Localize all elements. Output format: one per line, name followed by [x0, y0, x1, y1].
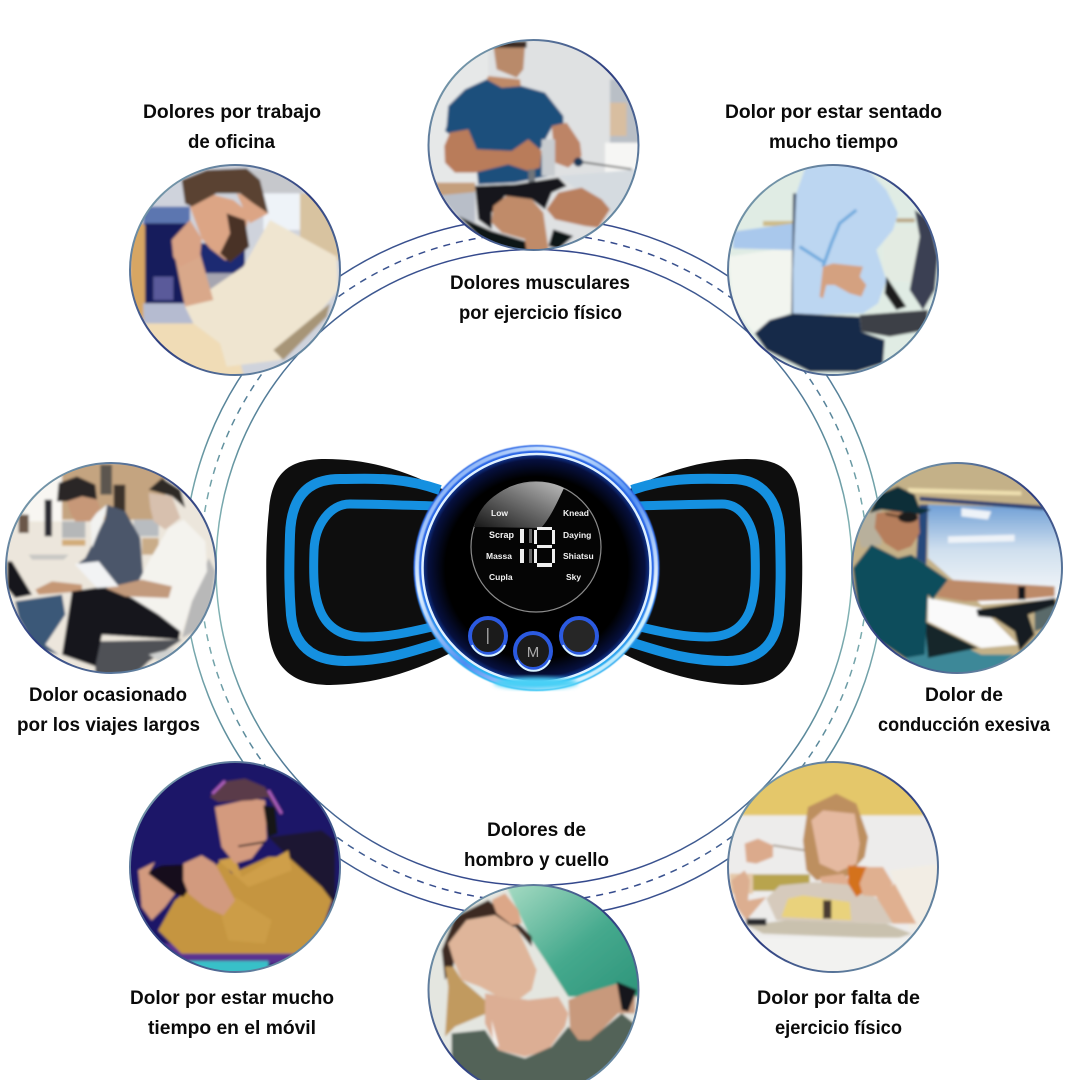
device LCD screen: Shiatsu	[563, 551, 594, 561]
device LCD screen	[471, 482, 601, 612]
LCD digits	[520, 527, 555, 567]
label: driving	[878, 685, 1050, 736]
label: no exercise: Dolor por falta de	[757, 988, 920, 1009]
device LCD screen: Sky	[566, 572, 581, 582]
label: no exercise	[757, 988, 920, 1039]
device LCD screen: Low	[491, 508, 508, 518]
device: butterfly massager	[266, 445, 802, 691]
label: trips: Dolor ocasionado	[29, 685, 187, 706]
device LCD screen: Massa	[486, 551, 512, 561]
label: trips	[17, 685, 200, 736]
label: sitting: mucho tiempo	[769, 132, 898, 153]
label: office: de oficina	[188, 132, 275, 153]
label: sitting: Dolor por estar sentado	[725, 102, 942, 123]
photo: sitting pain	[729, 166, 937, 374]
device LCD screen: Daying	[563, 530, 591, 540]
device LCD screen: Cupla	[489, 572, 513, 582]
label: exercise: Dolores musculares	[450, 273, 630, 294]
device hub	[414, 445, 660, 691]
label: driving: Dolor de	[925, 685, 1003, 706]
device LCD screen: Knead	[563, 508, 589, 518]
photo: phone pain	[131, 763, 339, 971]
photo: driving pain	[853, 464, 1061, 672]
label: exercise: por ejercicio físico	[459, 303, 622, 324]
label: shoulder	[464, 820, 609, 871]
photo: shoulder and neck pain	[430, 886, 638, 1080]
photo: office pain	[131, 166, 339, 374]
device left wing	[266, 459, 456, 685]
photo: long trips pain	[7, 464, 215, 672]
device right wing	[616, 459, 802, 685]
device buttons: M	[527, 644, 539, 661]
label: sitting	[725, 102, 942, 153]
label: phone: Dolor por estar mucho	[130, 988, 334, 1009]
device buttons	[470, 618, 597, 671]
connecting rings	[184, 218, 884, 918]
photo: no exercise pain	[729, 763, 937, 971]
label: no exercise: ejercicio físico	[775, 1018, 902, 1039]
label: shoulder: Dolores de	[487, 820, 586, 841]
label: exercise	[450, 273, 630, 324]
label: shoulder: hombro y cuello	[464, 850, 609, 871]
photo: exercise pain	[430, 41, 638, 249]
label: trips: por los viajes largos	[17, 715, 200, 736]
label: office	[143, 102, 321, 153]
label: phone	[130, 988, 334, 1039]
device LCD screen: Scrap	[489, 530, 515, 540]
label: driving: conducción exesiva	[878, 715, 1050, 736]
label: office: Dolores por trabajo	[143, 102, 321, 123]
label: phone: tiempo en el móvil	[148, 1018, 316, 1039]
